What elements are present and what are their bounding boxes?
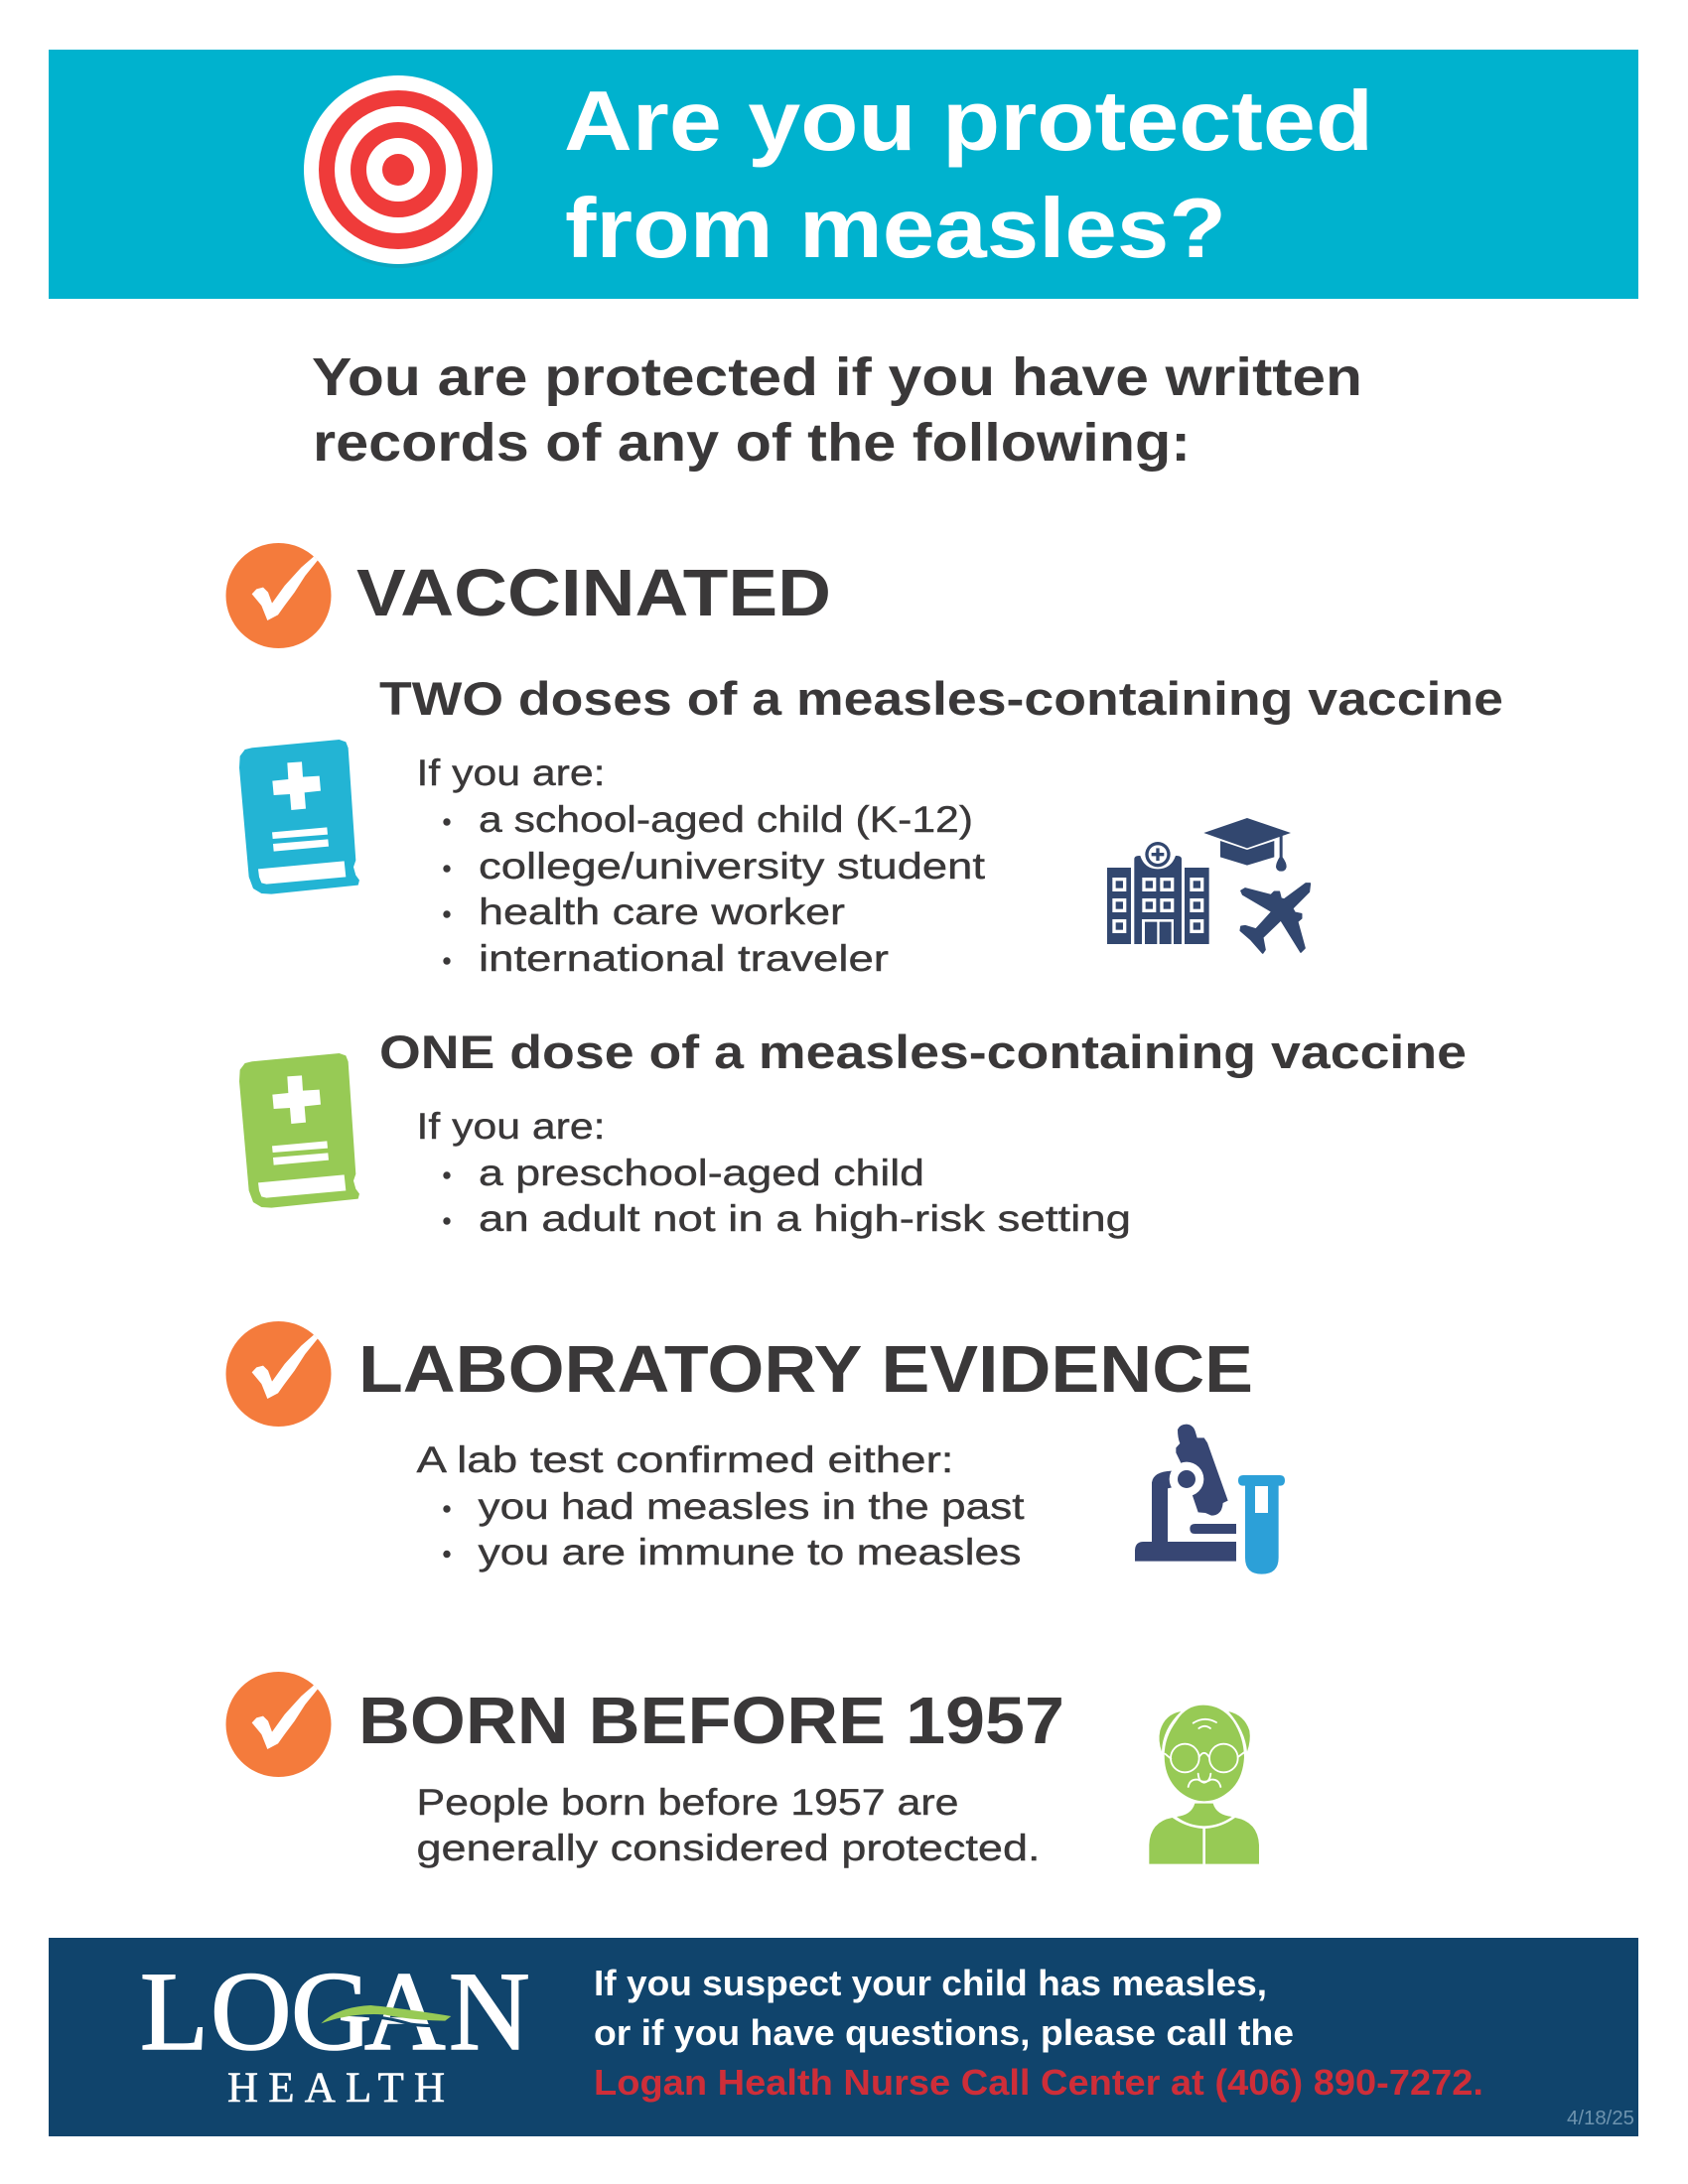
intro text: records of any of the following: xyxy=(313,413,1191,473)
icon: orange check xyxy=(226,1672,332,1777)
text block: one dose groups xyxy=(417,1106,1131,1239)
intro text: You are protected if you have written xyxy=(312,347,1362,407)
panel: header banner xyxy=(49,50,1638,299)
text block: two dose groups: college/university student xyxy=(479,846,986,887)
text block: lab test: A lab test confirmed either: xyxy=(417,1439,953,1480)
text block: lab test: you are immune to measles xyxy=(479,1532,1021,1572)
section: born before 1957 xyxy=(226,1672,1259,1868)
text block: two dose groups xyxy=(417,752,986,979)
subheading: one dose: ONE dose of a measles-containing vaccine xyxy=(379,1025,1467,1078)
intro text xyxy=(312,347,1362,473)
icon: older man xyxy=(1149,1706,1259,1864)
text block: lab test xyxy=(417,1439,1025,1572)
icon: microscope and test tube xyxy=(1135,1425,1285,1574)
text block: one dose groups: If you are: xyxy=(417,1106,606,1147)
text block: two dose groups: a school-aged child (K-12) xyxy=(479,799,973,840)
text block: born before 1957: generally considered protected. xyxy=(417,1828,1041,1868)
text block: one dose groups: a preschool-aged child xyxy=(479,1153,924,1193)
title xyxy=(564,74,1373,276)
text block: born before 1957 xyxy=(417,1782,1041,1868)
icon: target xyxy=(304,75,493,268)
icon: orange check xyxy=(226,1321,332,1427)
subheading: two doses: TWO doses of a measles-containing vaccine xyxy=(379,672,1503,725)
icon: hospital xyxy=(1107,842,1209,944)
date stamp: 4/18/25 xyxy=(1567,2108,1634,2129)
icon: airplane xyxy=(1240,884,1310,953)
title: from measles? xyxy=(565,182,1226,276)
text block: two dose groups: international traveler xyxy=(479,938,889,979)
logo: Logan Health: LOGAN xyxy=(140,1950,530,2074)
heading: born before 1957: BORN BEFORE 1957 xyxy=(358,1684,1064,1758)
call to action: If you suspect your child has measles, xyxy=(594,1963,1267,2003)
logo: Logan Health: HEALTH xyxy=(227,2065,445,2112)
icon: green medical book xyxy=(239,1053,359,1208)
section: vaccinated xyxy=(226,543,1503,1239)
text block: born before 1957: People born before 1957 are xyxy=(417,1782,959,1823)
heading: vaccinated: VACCINATED xyxy=(356,556,831,630)
text block: lab test: you had measles in the past xyxy=(479,1486,1025,1527)
icon: orange check xyxy=(226,543,332,648)
call to action: or if you have questions, please call the xyxy=(594,2012,1294,2053)
icon: hospital, graduation cap, airplane xyxy=(1107,818,1310,953)
heading: laboratory evidence: LABORATORY EVIDENCE xyxy=(358,1332,1253,1407)
call to action xyxy=(594,1963,1483,2103)
title: Are you protected xyxy=(564,74,1373,169)
text block: two dose groups: If you are: xyxy=(417,752,606,793)
panel: footer xyxy=(49,1938,1638,2136)
text block: one dose groups: an adult not in a high-risk setting xyxy=(479,1198,1131,1239)
icon: graduation cap xyxy=(1203,818,1291,872)
icon: blue medical book xyxy=(239,740,359,894)
text block: two dose groups: health care worker xyxy=(479,891,845,932)
call to action: Logan Health Nurse Call Center at (406) 890-7272. xyxy=(594,2062,1483,2103)
section: laboratory evidence xyxy=(226,1321,1285,1574)
